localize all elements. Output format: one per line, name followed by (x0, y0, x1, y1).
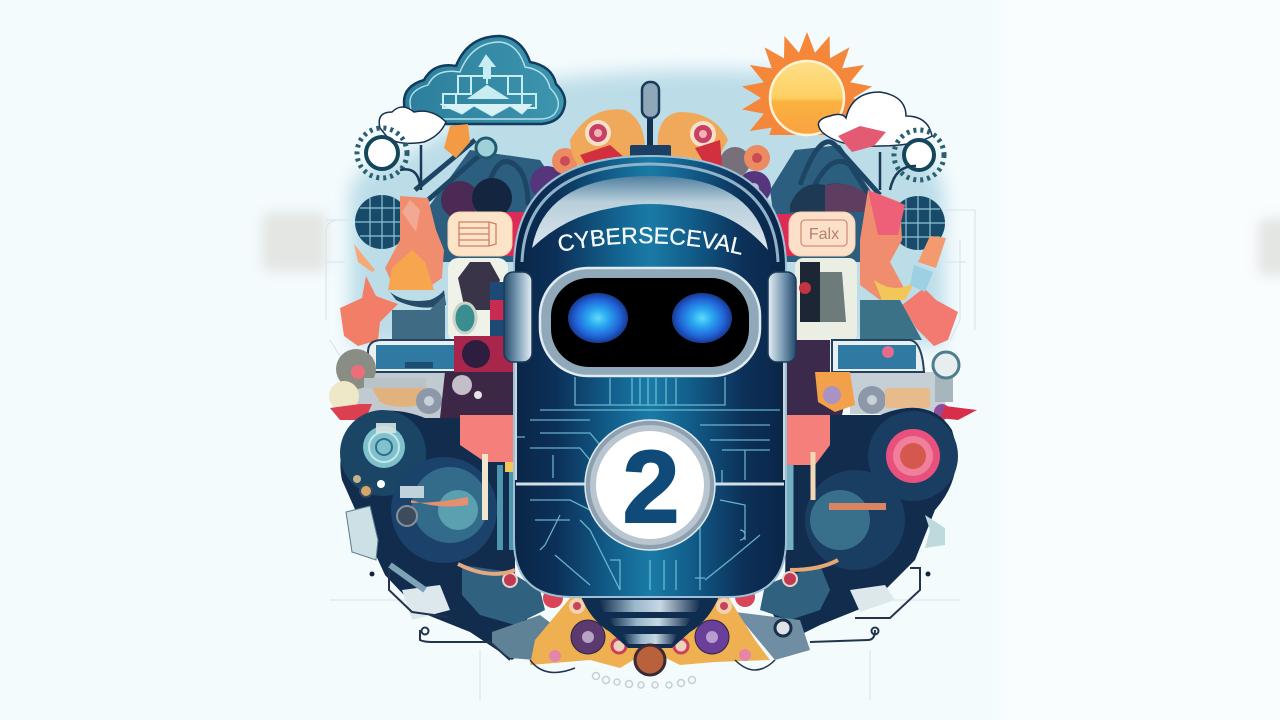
icon: left flame flower (385, 196, 444, 290)
icon: spiral gear left (363, 426, 405, 468)
robot body (513, 155, 787, 598)
icon: purple disc right (695, 620, 729, 654)
purple orbs (441, 181, 479, 219)
blue bowl (390, 290, 446, 308)
headphone left (504, 272, 532, 362)
antenna (630, 82, 671, 159)
background halo (350, 70, 944, 345)
pipes (415, 140, 528, 205)
lower right grey gear (735, 612, 810, 660)
pipes (880, 152, 916, 190)
top orange ornaments (570, 109, 728, 172)
machine column left (448, 258, 508, 342)
icon: right flame flower (860, 190, 905, 300)
right card: Falx note (789, 212, 855, 256)
bottom orange ornaments (530, 587, 775, 672)
number badge (585, 420, 715, 550)
icon: right eye (672, 293, 732, 343)
teal disc left (458, 564, 545, 625)
icon: network diagram (440, 56, 536, 116)
background smudges (262, 0, 1280, 720)
machine column right (795, 258, 857, 342)
left card: cream note (448, 212, 512, 256)
infographic illustration: CyberSecEval 2 robot (260, 32, 1280, 700)
icon: left eye (568, 293, 628, 343)
dome highlight cap (532, 176, 768, 250)
circuit traces on body (515, 377, 780, 590)
right card: red back (772, 214, 812, 256)
icon: globe left (355, 195, 409, 249)
left lower gears (340, 410, 560, 660)
icon: sun (742, 32, 872, 136)
panel seam (516, 482, 784, 486)
icon: sprocket left (357, 128, 407, 178)
right machinery: upper (720, 92, 958, 346)
small cloud left (379, 107, 446, 143)
cloud with network icon (404, 36, 565, 124)
small circles row (592, 672, 696, 688)
icon: purple disc left (571, 620, 605, 654)
yellow bowl (874, 280, 915, 300)
icon: pink target gear right (886, 429, 940, 483)
icon: orange flower on cloud (444, 124, 470, 158)
headphone right (768, 272, 796, 362)
small cloud right (818, 92, 932, 146)
dome rim (522, 164, 778, 262)
left card: red back (490, 212, 532, 256)
left control panel (329, 336, 515, 420)
robot nozzle (580, 594, 720, 675)
icon: coral flower right (902, 288, 958, 346)
circuit traces: background (326, 210, 975, 700)
wires left (389, 568, 510, 660)
right lower gears (735, 408, 958, 660)
teal lower plate left (492, 615, 560, 660)
right control panel (787, 340, 977, 420)
icon: coral flower left (340, 276, 398, 346)
number badge: 2 (623, 430, 679, 544)
icon: sprocket right (894, 130, 944, 180)
icon: globe right (891, 196, 945, 250)
right card: Falx note: Falx (809, 226, 839, 243)
title text: CYBERSECEVAL (558, 227, 742, 255)
backing: left upper machinery (430, 150, 560, 262)
visor (540, 268, 760, 376)
left machinery: upper (340, 107, 578, 346)
backing: right upper machinery (770, 145, 880, 262)
wires right (810, 568, 920, 642)
teal disc right (760, 560, 838, 620)
